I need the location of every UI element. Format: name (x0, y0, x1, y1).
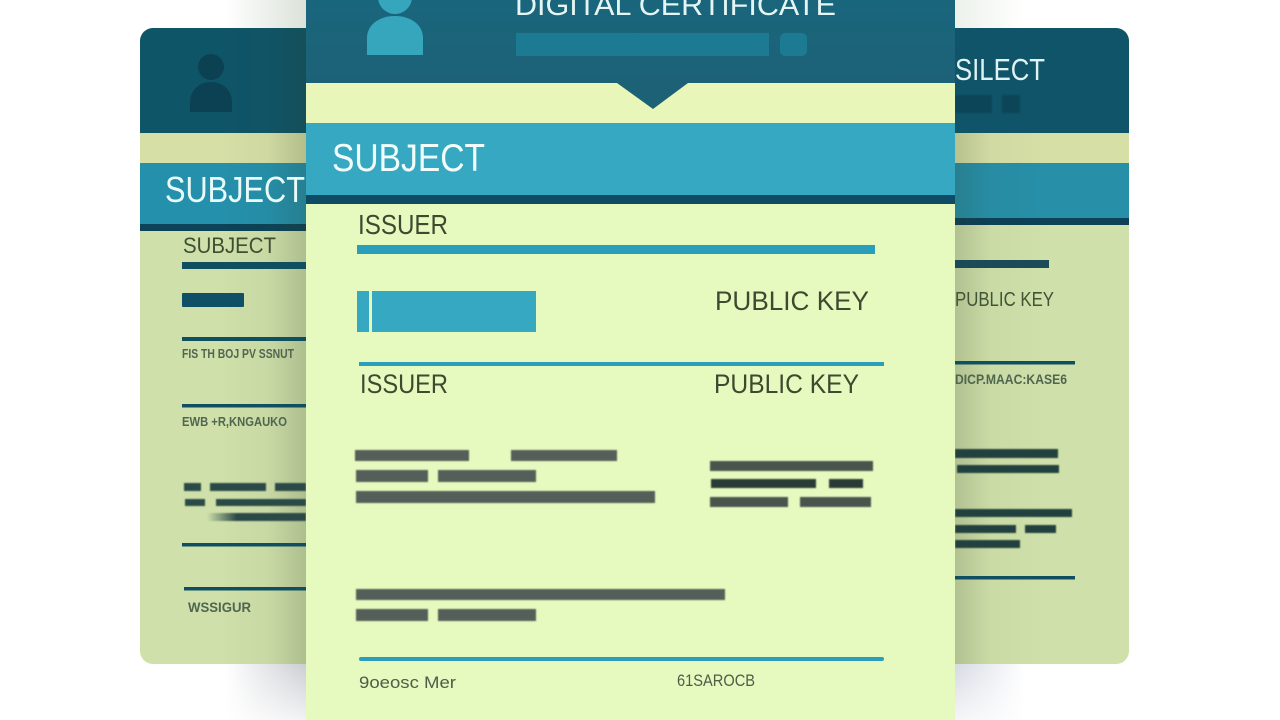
bottom divider line (359, 657, 884, 661)
right card header blocks (955, 95, 1020, 113)
issuer underline (357, 245, 875, 254)
left card field lines and text: FIS TH BOJ PV SSNUT (182, 346, 294, 361)
right card field lines and text: PUBLIC KEY (955, 289, 1054, 311)
lower text placeholder bars (356, 589, 725, 621)
center card header (306, 0, 955, 83)
left card field lines and text (182, 262, 306, 615)
icon: header pointer notch (617, 83, 688, 109)
second public key label: PUBLIC KEY (714, 369, 859, 399)
icon: center card person (367, 0, 423, 55)
cream strip below header (306, 83, 955, 123)
panel: left certificate card (140, 28, 306, 664)
panel: right certificate card (955, 28, 1129, 664)
footer signature label: 9oeosc Mer (359, 673, 456, 692)
left card SUBJECT heading: SUBJECT (165, 169, 305, 210)
left card field lines and text: WSSIGUR (188, 599, 251, 615)
right card field lines and text (955, 260, 1075, 580)
key block (357, 291, 536, 332)
public key label: PUBLIC KEY (715, 286, 869, 316)
right card field lines and text: DICP.MAAC:KASE6 (955, 371, 1067, 387)
footer code label: 61SAROCB (677, 671, 755, 690)
left card field lines and text: EWB +R,KNGAUKO (182, 414, 287, 429)
subject band shadow (306, 195, 955, 204)
issuer label: ISSUER (358, 209, 448, 240)
right card SILECT heading: SILECT (955, 52, 1045, 87)
divider line (359, 362, 884, 366)
subject band (306, 123, 955, 195)
left text placeholder bars (355, 450, 655, 503)
infographic: three overlapping digital certificate cards (140, 0, 1129, 720)
right text placeholder bars (710, 461, 873, 507)
second issuer label: ISSUER (360, 369, 448, 399)
header placeholder bars (516, 33, 807, 56)
icon: left card person (190, 54, 232, 112)
panel: center certificate card (306, 0, 955, 720)
background shadows around the cards (225, 0, 1025, 720)
left card small SUBJECT label: SUBJECT (183, 233, 276, 258)
SUBJECT heading: SUBJECT (332, 137, 485, 180)
